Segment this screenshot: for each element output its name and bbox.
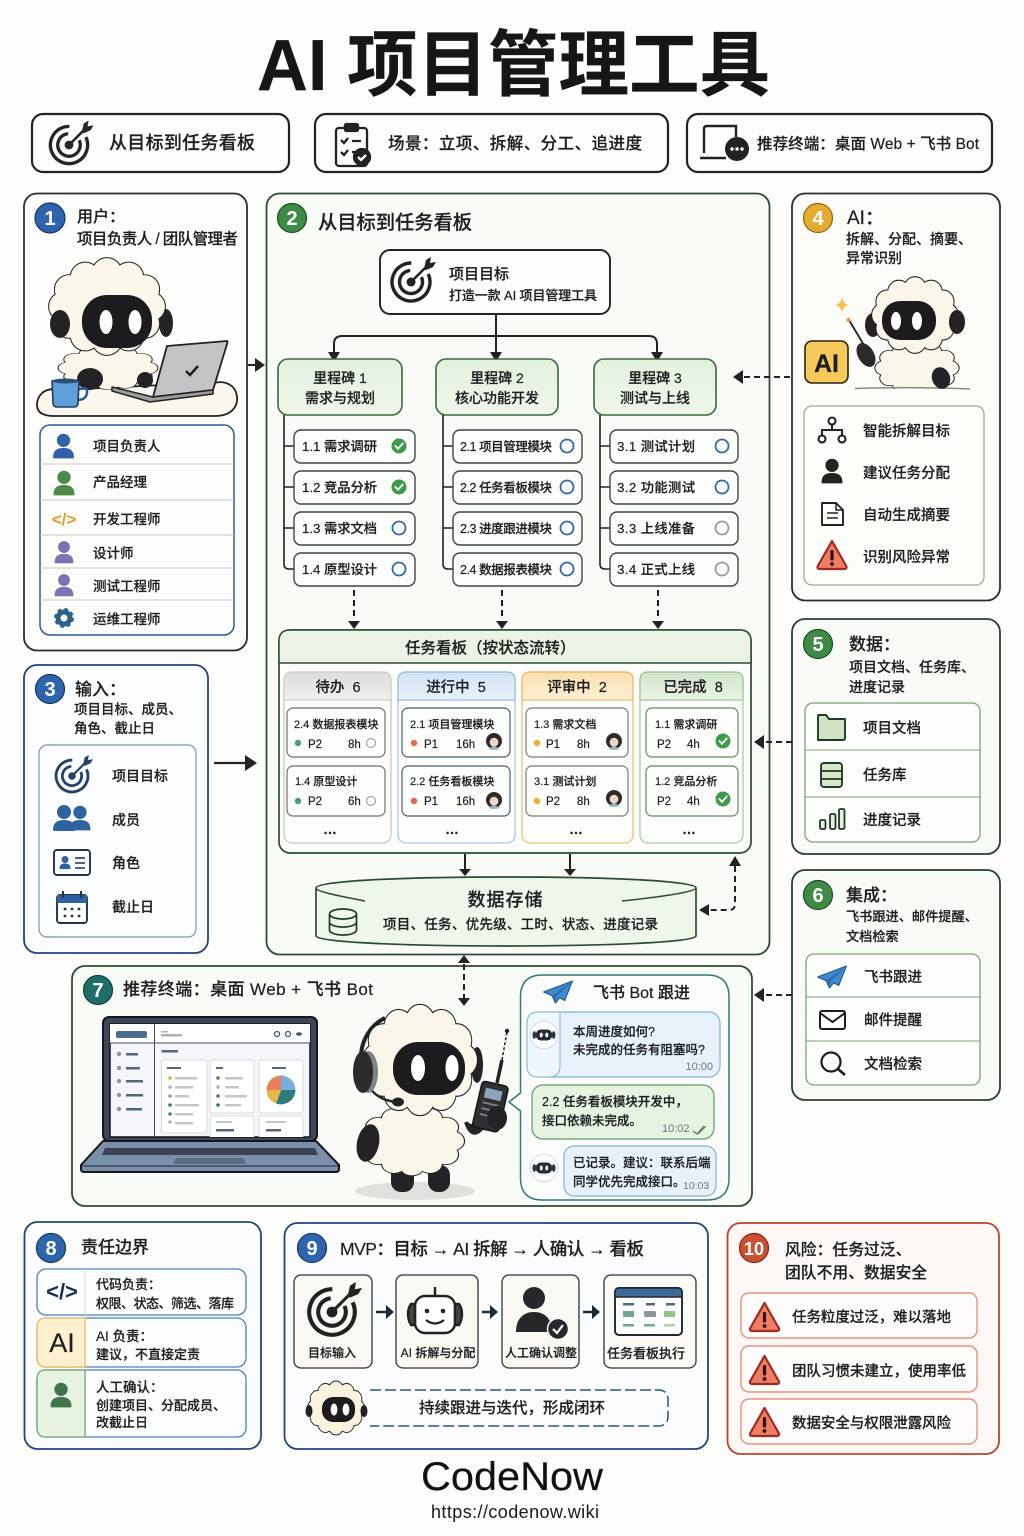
column: done: 4h [687,796,700,808]
arrow [482,1305,498,1319]
banner text: 从目标到任务看板 [109,133,255,153]
icon: database [330,909,356,935]
row: AI [37,1318,246,1367]
milestone 1: 需求与规划 [305,390,375,406]
banner: goal to kanban [32,114,289,172]
dashed arrow: storage to kanban [699,856,741,916]
title: AI 项目管理工具 [257,26,770,106]
step: AI decompose: AI 拆解与分配 [401,1345,475,1360]
panel 2: goal to kanban [266,194,770,954]
panel 6: integration [792,870,1000,1100]
row: human: 创建项目、分配成员、 [96,1398,226,1413]
message: bot suggestion: 已记录。建议：联系后端 [573,1155,711,1170]
banner: terminal [687,114,992,172]
item: progress: 进度记录 [863,812,921,829]
task tree: milestone 2 [443,415,582,586]
radio [466,1029,509,1133]
task tree: milestone 2: 2.3 进度跟进模块 [460,521,552,536]
heading: user: 用户： [77,208,125,226]
chat panel: feishu bot [509,975,729,1200]
task tree: milestone 3: 3.3 上线准备 [617,520,695,536]
milestone 2 [436,359,558,415]
message: bot suggestion: 10:03 [683,1180,709,1192]
panel 9: MVP [284,1223,708,1449]
role: project owner: 项目负责人 [93,439,161,454]
step: human confirm [502,1275,579,1368]
panel 8: responsibility [24,1222,261,1449]
task tree: milestone 3: 3.2 功能测试 [617,480,695,495]
loop sheep icon [306,1382,368,1434]
role: designer [55,541,134,563]
goal text: 打造一款 AI 项目管理工具 [449,288,597,303]
role: ops [56,610,160,627]
row: AI: AI [49,1328,75,1358]
badge 1 [35,203,65,233]
task tree: milestone 2: 2.1 项目管理模块 [460,439,552,454]
column: done [640,672,743,843]
role: developer: </> [52,510,76,529]
role: product manager: 产品经理 [93,475,147,490]
column: todo: P2 [308,796,322,808]
kanban board [279,630,751,853]
icon: AI badge: AI [814,350,839,378]
role: developer [52,510,160,529]
column: done: P2 [657,796,671,808]
goal box [380,250,610,314]
role: ops: 运维工程师 [93,612,160,627]
item: documents: 项目文档 [863,719,921,737]
milestone 3: 测试与上线 [620,390,690,406]
badge 8 [36,1234,66,1262]
list: input items [39,745,196,937]
item: role [54,850,140,875]
panel 5: data [792,619,1000,854]
role: developer: 开发工程师 [93,512,160,527]
badge 4: 4 [812,208,824,230]
column: todo [284,672,391,843]
storage title: 数据存储 [468,890,542,910]
step: goal input: 目标输入 [308,1345,356,1360]
message: user reply: 2.2 任务看板模块开发中， [542,1094,688,1109]
task tree: milestone 3: 3.4 正式上线 [617,562,695,577]
data storage cylinder [316,877,696,946]
row: AI: 建议，不直接定责 [96,1347,200,1362]
heading: integration: 飞书跟进、邮件提醒、 [846,909,978,924]
dashed arrow: flow to terminal [458,955,470,1006]
item: goal: 项目目标 [112,768,168,784]
badge 7: 7 [92,980,104,1002]
arrow: input to flow [214,755,257,771]
arrow [376,1305,394,1319]
heading: data: 数据： [849,635,900,654]
message: bot question: 本周进度如何? [573,1024,655,1039]
risk 2: 团队习惯未建立，使用率低 [792,1362,966,1380]
badge 7 [84,976,112,1004]
badge 10: 10 [744,1239,764,1259]
row: human: 人工确认： [96,1380,164,1395]
icon: target [44,120,94,170]
row: AI: AI 负责： [96,1329,153,1344]
heading: 风险：任务过泛、 [785,1241,911,1259]
item: goal [51,755,168,797]
arrow: user to flow [248,358,265,372]
step: kanban execute [604,1275,696,1368]
connectors: goal to milestones [328,314,663,362]
item: search: 文档检索 [864,1055,922,1073]
badge 2: 2 [286,208,298,230]
loop box [370,1390,668,1426]
item: feishu: 飞书跟进 [864,969,922,986]
item: task store [821,763,906,787]
goal text: 项目目标 [449,266,509,283]
heading: input: 角色、截止日 [74,720,155,736]
risk 1: 任务粒度过泛，难以落地 [792,1309,952,1326]
heading [785,1241,927,1282]
step: AI decompose [396,1275,478,1368]
icon: target [386,257,436,307]
item: search [822,1052,922,1075]
badge 9 [298,1234,326,1262]
heading: AI [846,208,972,266]
badge 3 [36,674,64,704]
goal text [449,266,597,303]
column: in progress: 2.1 项目管理模块 [410,717,494,731]
chat title: 飞书 Bot 跟进 [593,984,690,1002]
column: in progress: 16h [456,796,475,808]
dashed arrow: data to flow [754,735,792,749]
item: email: 邮件提醒 [864,1012,922,1029]
panel 1: user [24,194,247,650]
illustration: laptop dashboard [81,1017,339,1172]
column: done: P2 [657,739,671,751]
item: assign: 建议任务分配 [863,464,950,482]
heading: integration [846,886,978,944]
storage text: 项目、任务、优先级、工时、状态、进度记录 [383,916,658,932]
milestone 1: 里程碑 1 [313,370,367,386]
message: bot suggestion: 同学优先完成接口。 [573,1174,686,1189]
item: role: 角色 [112,855,140,871]
role: designer: 设计师 [93,546,134,561]
illustration: sheep with laptop [37,258,237,416]
milestone 3: 里程碑 3 [628,370,682,386]
icon: laptop chat [700,126,749,161]
list: AI capabilities [804,406,984,585]
column: in progress: P1 [424,796,438,808]
column: done: 1.2 竞品分析 [655,774,717,788]
task tree: milestone 1 [284,415,415,586]
risk 1 [741,1293,977,1338]
column: todo: 8h [348,739,361,751]
panel 10: risks [728,1223,999,1454]
message: bot question: 10:00 [685,1061,713,1073]
column: done: … [682,821,696,837]
column: todo: … [323,821,337,837]
item: feishu [818,966,922,988]
panel 3: input [24,665,208,953]
arrows: kanban to storage [459,854,576,876]
item: deadline: 截止日 [112,899,154,915]
item: summary: 自动生成摘要 [863,506,950,524]
heading: input: 输入： [75,680,126,699]
heading: 团队不用、数据安全 [785,1263,927,1282]
task tree: milestone 3: 3.1 测试计划 [617,439,695,454]
task tree: milestone 2: 2.2 任务看板模块 [460,480,552,495]
role: product manager [54,471,147,495]
column: in progress: 2.2 任务看板模块 [410,774,494,788]
column: todo: 2.4 数据报表模块 [294,717,378,731]
item: decompose [818,418,950,442]
milestone 1 [278,359,402,415]
heading: data: 进度记录 [849,679,905,695]
risk 3 [741,1399,977,1444]
badge 6 [804,880,832,910]
risk 3: 数据安全与权限泄露风险 [792,1414,952,1432]
step: kanban execute: 任务看板执行 [607,1346,685,1361]
row: code: 代码负责： [96,1277,161,1292]
illustration: sheep with wand [835,277,970,401]
heading: MVP：目标 → AI 拆解 → 人确认 → 看板 [340,1239,644,1259]
column: done: 4h [687,739,700,751]
banner text: 场景：立项、拆解、分工、追进度 [388,134,642,153]
row: code: 权限、状态、筛选、落库 [96,1296,234,1311]
message: bot question: 未完成的任务有阻塞吗? [573,1042,705,1057]
column: in progress: … [445,821,459,837]
item: progress [820,809,921,829]
banner: scenario [315,114,668,172]
badge 1: 1 [44,208,56,230]
dashed arrow: AI to flow [733,370,790,384]
dashed arrow: integration to terminal [754,988,792,1002]
column: review: 1.3 需求文档 [534,717,596,731]
column: todo: 6h [348,796,361,808]
item: members [53,805,140,831]
task tree: milestone 2: 2.4 数据报表模块 [460,562,552,577]
role: project owner [53,434,161,458]
kanban heading: 任务看板（按状态流转） [405,638,576,657]
column: review: 评审中 2 [547,678,607,696]
column: review: P1 [546,739,560,751]
column: review: … [569,821,583,837]
task tree: milestone 1: 1.1 需求调研 [302,439,377,454]
column: done: 1.1 需求调研 [655,717,717,731]
column: in progress: 进行中 5 [426,679,486,696]
heading: 从目标到任务看板 [318,212,472,234]
heading: data [849,635,975,695]
pie chart [266,1076,296,1104]
column: review: P2 [546,796,560,808]
badge 5 [804,630,832,658]
column: review: 8h [577,739,590,751]
heading: AI: AI： [847,208,884,229]
footer logo: CodeNow [421,1455,603,1499]
heading: input [74,680,182,736]
item: summary [822,503,950,525]
item: documents [818,715,921,740]
icon: AI badge [805,341,848,383]
item: email [820,1011,922,1029]
heading: user [77,208,238,248]
step: human confirm: 人工确认调整 [505,1345,577,1360]
column: todo: 待办 6 [315,679,361,696]
heading: input: 项目目标、成员、 [74,702,182,717]
panel 7: terminal [72,966,752,1206]
list: integrations [806,954,980,1085]
heading: data: 项目文档、任务库、 [849,659,975,675]
heading: AI: 异常识别 [846,250,902,266]
message: bot question [527,1012,720,1077]
column: todo: P2 [308,739,322,751]
milestone 3 [594,359,716,415]
heading: integration: 集成： [846,886,897,905]
heading: AI: 拆解、分配、摘要、 [846,231,972,247]
column: in progress [398,672,515,843]
row: human [37,1370,246,1437]
icon: plane [544,981,572,1003]
arrow [583,1305,600,1319]
heading: user: 项目负责人 / 团队管理者 [77,229,238,248]
column: in progress: P1 [424,739,438,751]
role: tester: 测试工程师 [93,579,160,594]
item: assign [822,459,950,483]
task tree: milestone 1: 1.4 原型设计 [302,562,377,577]
row: code: </> [46,1279,78,1304]
item: risk [817,541,950,569]
item: risk: 识别风险异常 [863,548,950,566]
heading: integration: 文档检索 [846,928,899,944]
badge 3: 3 [44,679,56,701]
task tree: milestone 3 [600,415,738,586]
column: review: 3.1 测试计划 [534,774,596,788]
task tree: milestone 1: 1.3 需求文档 [302,520,377,536]
message: user reply: 接口依赖未完成。 [542,1113,642,1128]
row: code [37,1269,246,1315]
message: bot suggestion [530,1146,716,1196]
column: todo: 1.4 原型设计 [295,774,357,788]
heading: 责任边界 [81,1238,149,1257]
dashed arrows: tasks to kanban [348,590,664,629]
heading: 推荐终端：桌面 Web + 飞书 Bot [123,980,373,999]
row: human: 改截止日 [96,1415,148,1430]
item: task store: 任务库 [863,767,906,784]
column: done: 已完成 8 [663,678,723,696]
milestone 2: 里程碑 2 [470,370,524,386]
icon: clipboard [336,124,370,166]
item: members: 成员 [112,812,140,828]
badge 8: 8 [45,1238,57,1260]
column: review [522,672,633,843]
badge 10 [740,1234,768,1262]
step: goal input [294,1275,372,1368]
badge 6: 6 [812,885,824,907]
illustration: sheep with headset and radio [353,1005,509,1200]
loop box: 持续跟进与迭代，形成闭环 [419,1399,605,1417]
message: user reply: 10:02 [662,1123,690,1135]
list: roles [40,425,234,635]
item: decompose: 智能拆解目标 [863,422,950,440]
list: data items [805,703,980,842]
badge 4 [804,204,832,232]
footer url: https://codenow.wiki [431,1502,599,1522]
message: user reply [532,1085,714,1139]
task tree: milestone 1: 1.2 竞品分析 [302,479,377,495]
item: deadline [57,891,154,923]
badge 9: 9 [306,1238,318,1260]
badge 5: 5 [812,634,824,656]
column: in progress: 16h [456,739,475,751]
column: review: 8h [577,796,590,808]
risk 2 [741,1346,977,1392]
banner text: 推荐终端：桌面 Web + 飞书 Bot [757,135,980,153]
panel 4: AI [792,194,1000,600]
milestone 2: 核心功能开发 [455,390,539,406]
role: tester [55,574,160,596]
badge 2 [278,204,306,232]
